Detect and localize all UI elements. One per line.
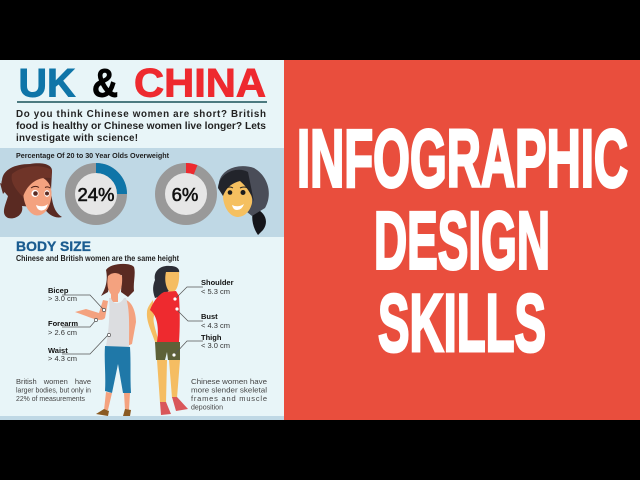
intro paragraph: Do you think Chinese women are short? British	[16, 109, 266, 120]
callout: thigh: < 3.0 cm	[201, 341, 230, 350]
callout: waist	[48, 346, 77, 363]
callout: forearm	[48, 319, 78, 337]
title: infographic design skills	[297, 114, 628, 369]
chart: China donut 6%	[160, 168, 212, 220]
text block: British women: British women have	[16, 377, 91, 386]
figure: British woman	[75, 264, 136, 416]
panel: red title background	[284, 60, 640, 420]
callout: thigh: Thigh	[201, 333, 222, 342]
chart: UK donut 24%: 24%	[77, 184, 115, 205]
callout: forearm: > 2.6 cm	[48, 328, 77, 337]
title: UK & China: CHINA	[134, 62, 266, 106]
callout: bicep: > 3.0 cm	[48, 294, 77, 303]
heading: body size: BODY SIZE	[16, 238, 91, 254]
icon: British woman face	[0, 163, 62, 218]
chart label: Percentage Of 20 to 30 Year Olds Overweight	[16, 151, 170, 160]
text block: British women: 22% of measurements	[16, 394, 85, 403]
intro paragraph: investigate with science!	[16, 133, 138, 144]
chart: UK donut 24%	[70, 168, 122, 220]
text block: British women: larger bodies, but only in	[16, 386, 91, 394]
callout: waist: > 4.3 cm	[48, 354, 77, 363]
title: UK & China: UK	[18, 62, 76, 106]
panel: overweight band	[0, 148, 284, 237]
callout: shoulder: < 5.3 cm	[201, 287, 230, 296]
title: UK & China: &	[92, 62, 118, 106]
callout: bicep	[48, 286, 77, 303]
intro paragraph: food is healthy or Chinese women live longer? Lets	[16, 121, 267, 132]
panel: infographic preview	[0, 60, 284, 420]
callout: waist: Waist	[48, 346, 68, 355]
callout: bicep: Bicep	[48, 286, 69, 295]
callout: thigh	[201, 333, 230, 350]
callout: shoulder	[201, 278, 234, 296]
intro paragraph	[16, 109, 267, 144]
callout: shoulder: Shoulder	[201, 278, 234, 287]
figure: Chinese woman	[147, 266, 188, 415]
chart: China donut 6%: 6%	[172, 184, 198, 205]
text block: Chinese women	[191, 377, 267, 412]
title: UK & China	[18, 62, 266, 106]
text block: Chinese women: frames and muscle	[191, 394, 267, 403]
text block: British women	[16, 377, 91, 403]
subheading: Chinese and British women are the same height	[16, 254, 179, 263]
callout: forearm: Forearm	[48, 319, 78, 328]
text block: Chinese women: deposition	[191, 402, 223, 412]
callout: bust: < 4.3 cm	[201, 321, 230, 330]
callout: bust	[201, 312, 230, 330]
icon: Chinese woman face	[218, 166, 269, 235]
callout: bust: Bust	[201, 312, 218, 321]
text block: Chinese women: Chinese women have	[191, 377, 267, 386]
callout lines and markers	[62, 287, 203, 357]
text block: Chinese women: more slender skeletal	[191, 386, 267, 394]
